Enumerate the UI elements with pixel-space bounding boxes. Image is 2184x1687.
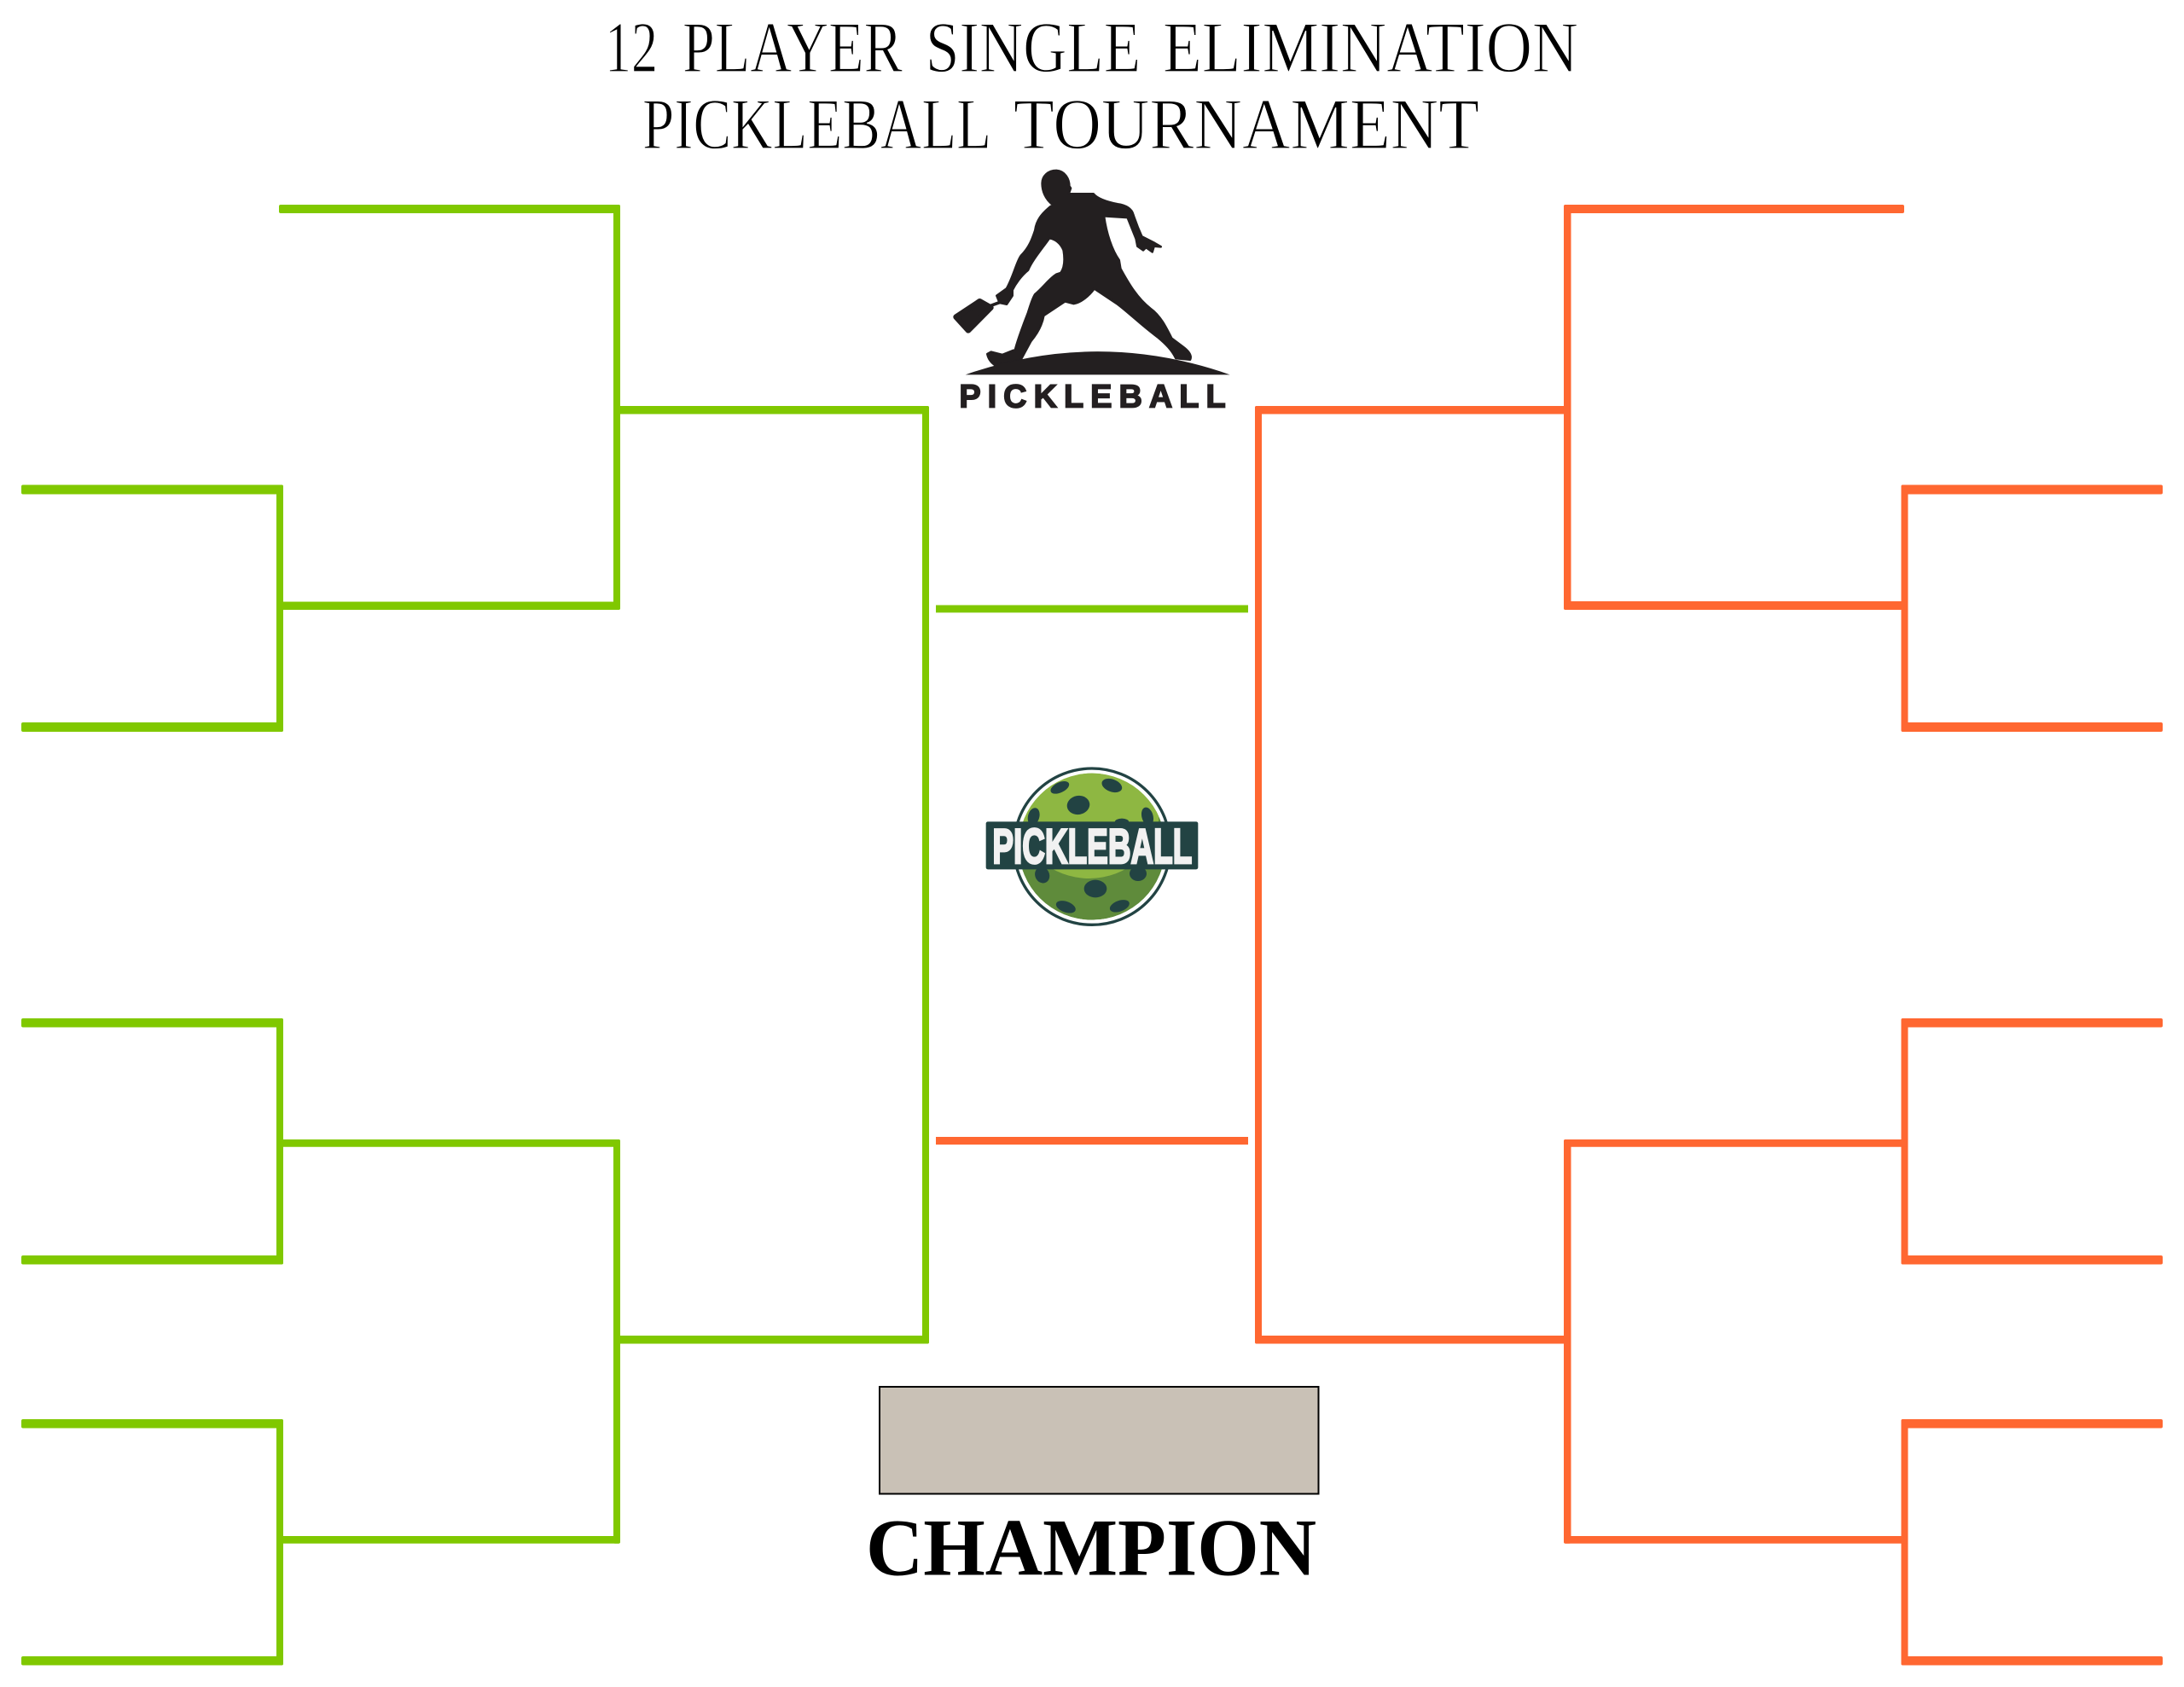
ball body bbox=[1022, 773, 1162, 920]
bracket: green side bbox=[21, 205, 1248, 1665]
title: PLAYER bbox=[682, 8, 903, 88]
title: TOURNAMENT bbox=[1014, 84, 1479, 165]
green semifinal connector bbox=[613, 406, 929, 1344]
badge banner bbox=[986, 821, 1198, 869]
green round 2, upper pair bbox=[276, 205, 620, 610]
green round 1, upper pair bbox=[21, 484, 283, 732]
champion label: CHAMPION bbox=[866, 1503, 1316, 1593]
bracket: orange side bbox=[936, 205, 2163, 1665]
title: PICKLEBALL bbox=[642, 84, 991, 165]
title: SINGLE bbox=[926, 8, 1141, 88]
orange round 1, lower pair B bbox=[1901, 1419, 2163, 1665]
outer ring bbox=[1014, 768, 1170, 925]
paddle handle bbox=[990, 300, 1002, 307]
orange finalist line bbox=[936, 1137, 1248, 1145]
title bbox=[605, 8, 1578, 165]
green round 1, lower pair B bbox=[21, 1419, 283, 1665]
title: 12 bbox=[605, 8, 658, 88]
player figure bbox=[987, 171, 1191, 365]
orange round 2, lower pair bbox=[1564, 1139, 1908, 1544]
orange semifinal connector bbox=[1255, 406, 1571, 1344]
icon: pickleball ball badge bbox=[986, 751, 1198, 925]
ball holes bbox=[1026, 776, 1155, 915]
title: ELIMINATION bbox=[1163, 8, 1578, 88]
green finalist line bbox=[936, 606, 1248, 612]
ground arc bbox=[966, 351, 1230, 374]
orange round 1, lower pair A bbox=[1901, 1018, 2163, 1264]
orange round 1, upper pair bbox=[1901, 484, 2163, 732]
orange round 2, upper pair bbox=[1564, 205, 1908, 610]
green round 2, lower pair bbox=[276, 1139, 620, 1544]
badge word: PICKLEBALL bbox=[992, 820, 1192, 874]
champion box bbox=[880, 1387, 1319, 1494]
green round 1, lower pair A bbox=[21, 1018, 283, 1264]
paddle bbox=[956, 301, 990, 330]
icon: pickleball player silhouette logo bbox=[956, 171, 1230, 415]
logo word: PICKLEBALL bbox=[959, 379, 1226, 415]
